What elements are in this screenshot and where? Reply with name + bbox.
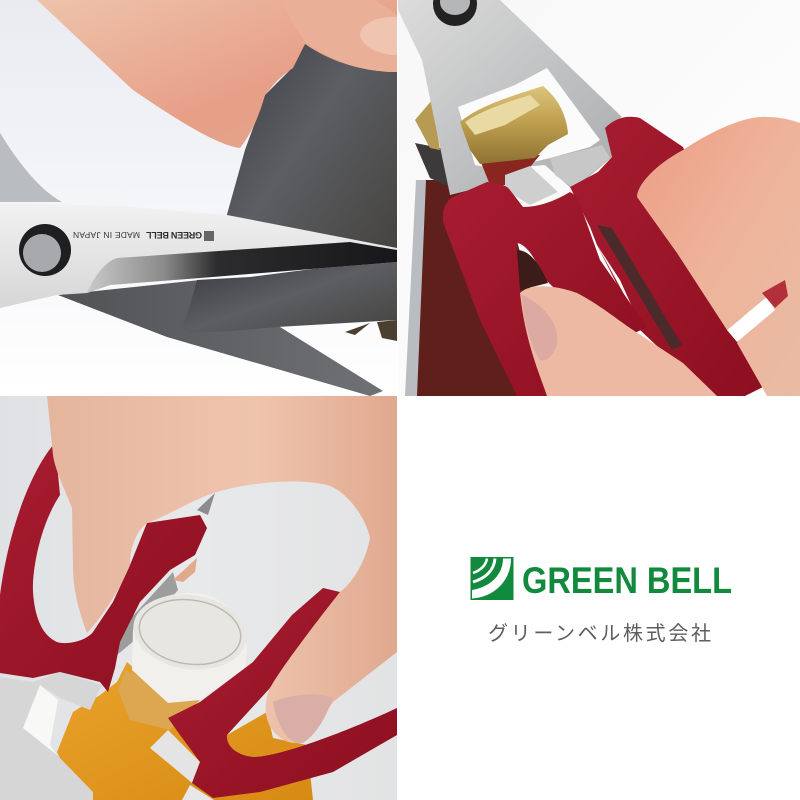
icon: hand over handles bbox=[47, 396, 397, 743]
icon: teeth upper bbox=[117, 572, 178, 655]
icon: bottle body bbox=[57, 662, 313, 800]
icon: steel jaws bbox=[0, 672, 102, 800]
icon: bottle glass edge bbox=[405, 180, 426, 396]
icon: bottle bbox=[417, 180, 530, 396]
icon: upper kelp sheet bbox=[226, 44, 397, 248]
panel: opening a bottle cap bbox=[398, 0, 800, 396]
icon: fingers bbox=[637, 117, 800, 396]
icon: steel corner bbox=[182, 785, 214, 800]
icon: kelp fragment bbox=[345, 320, 397, 341]
icon: thumbnail bbox=[273, 695, 333, 743]
icon: teeth lower bbox=[253, 633, 285, 675]
text: blade engraving bbox=[74, 232, 202, 238]
icon: left loop handle bbox=[0, 443, 207, 692]
icon: bottle cap bbox=[460, 86, 568, 164]
icon: bottle in gap bbox=[517, 250, 548, 290]
panel: logo bbox=[470, 557, 732, 645]
icon: green bell logo mark bbox=[470, 557, 514, 600]
icon: bottle neck bbox=[118, 670, 200, 730]
icon: spring bbox=[597, 225, 682, 350]
icon: red glimpse bbox=[762, 280, 788, 308]
icon: steel arm bbox=[550, 145, 610, 188]
icon: steel tip bbox=[197, 493, 215, 515]
text: blade engraving: MADE IN JAPAN bbox=[73, 230, 140, 240]
icon: steel jaws bbox=[398, 0, 622, 195]
icon: pivot screw bbox=[433, 0, 477, 26]
icon: right red handle bbox=[168, 588, 397, 798]
panel: opening a plastic bottle bbox=[0, 396, 397, 800]
icon: lower kelp piece bbox=[181, 258, 397, 333]
icon: cap highlight bbox=[465, 95, 540, 135]
icon: steel block bbox=[505, 166, 558, 205]
icon: thumbnail bbox=[522, 295, 557, 360]
icon: serrated blade edge bbox=[87, 242, 397, 293]
icon: thumb bbox=[296, 0, 397, 72]
icon: pivot screw bbox=[19, 224, 71, 276]
icon: upper scissor blade bbox=[0, 203, 397, 308]
icon: left red handle bbox=[443, 182, 647, 396]
text: blade engraving: GREEN BELL bbox=[146, 230, 202, 240]
icon: hand holding kelp bbox=[37, 0, 397, 148]
icon: handle stub bbox=[0, 133, 62, 202]
icon: lower scissor blade bbox=[58, 280, 383, 396]
icon: thumbnail bbox=[360, 17, 397, 55]
icon: lower steel tip bbox=[150, 730, 200, 783]
heading: brand name: GREEN BELL bbox=[522, 560, 732, 601]
icon: bottle neck ring bbox=[415, 143, 448, 187]
icon: white gap between fingers bbox=[727, 297, 775, 342]
icon: white gap bbox=[597, 245, 645, 335]
icon: cap back bbox=[415, 100, 440, 150]
text: company name: グリーンベル株式会社 bbox=[488, 622, 711, 645]
icon: opening in jaws bbox=[458, 68, 600, 170]
icon: thumb bbox=[520, 286, 717, 396]
panel: scissors cutting kelp bbox=[0, 0, 397, 396]
icon: red liquid under cap bbox=[480, 155, 540, 185]
icon: finger behind handle bbox=[173, 558, 197, 582]
icon: steel highlight bbox=[23, 685, 58, 755]
icon: bottle cap bbox=[128, 587, 252, 703]
icon: right red handle bbox=[570, 117, 763, 396]
icon: engraved logo mark bbox=[204, 231, 214, 241]
